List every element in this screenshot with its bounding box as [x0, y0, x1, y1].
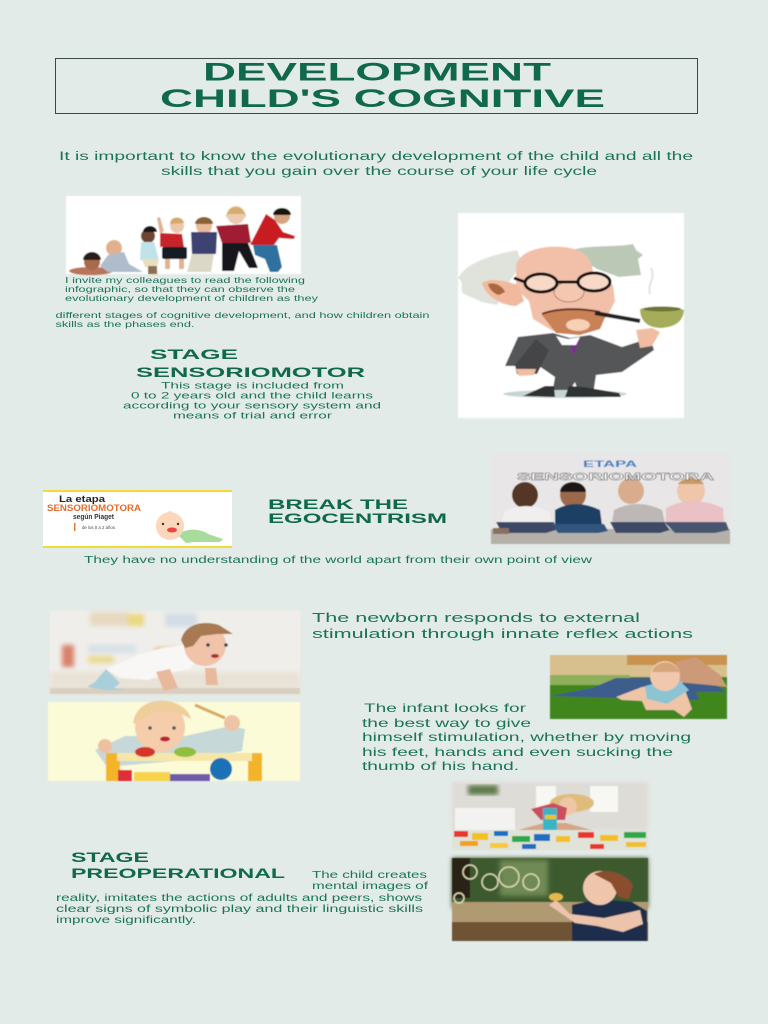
banner: La etapa sensoriomotora: [43, 490, 232, 548]
nose: [554, 282, 584, 302]
invitation text: skills as the phases end.: [56, 319, 194, 329]
invitation text: different stages of cognitive development, and how children obtain: [56, 310, 430, 320]
hand: [516, 328, 660, 376]
child 7: red shirt and jeans: [250, 208, 295, 272]
banner: La etapa sensoriomotora: SENSORIOMOTORA: [47, 503, 142, 513]
hair: [458, 250, 522, 305]
invitation text: I invite my colleagues to read the following: [65, 275, 305, 285]
infant stimulation text: himself stimulation, whether by moving: [362, 730, 691, 744]
child 4: red shirt: [157, 217, 187, 269]
banner: La etapa sensoriomotora: según Piaget: [73, 514, 115, 521]
preoperational description: mental images of: [312, 881, 428, 892]
newborn reflex text: [312, 610, 694, 641]
heading: break the egocentrism: BREAK THE: [268, 497, 408, 512]
pipe: [595, 313, 640, 321]
preoperational description: The child creates: [312, 870, 427, 881]
child 3: aqua shirt: [140, 226, 159, 275]
babies: [493, 477, 729, 534]
icon: crawling baby: [156, 511, 223, 543]
preoperational description: [56, 870, 428, 926]
banner: La etapa sensoriomotora: de los 0 a 2 años: [82, 525, 116, 530]
head: [516, 247, 615, 333]
shoes: [503, 390, 627, 398]
infant stimulation text: the best way to give: [362, 716, 532, 730]
child 2: baby sitting: [100, 240, 143, 272]
title: DEVELOPMENT: [203, 58, 551, 86]
banner: La etapa sensoriomotora: La etapa: [59, 494, 106, 505]
photo: row of growing children: [66, 196, 301, 275]
intro text: skills that you gain over the course of your life cycle: [161, 166, 597, 178]
heading: stage preoperational: [71, 849, 286, 881]
sensoriomotor description: means of trial and error: [173, 410, 332, 422]
photo: four sitting babies: SENSORIOMOTORA: [517, 471, 715, 483]
egocentrism caption: They have no understanding of the world apart from their own point of view: [84, 555, 593, 566]
child 1: crawling baby: [69, 252, 113, 275]
photo: four sitting babies: [491, 453, 730, 544]
title: CHILD'S COGNITIVE: [160, 85, 605, 113]
infant stimulation text: his feet, hands and even sucking the: [362, 745, 674, 759]
photo: child playing with blocks: [452, 782, 648, 850]
intro text: It is important to know the evolutionary development of the child and all the: [59, 151, 693, 163]
glasses: [514, 273, 610, 292]
heading: break the egocentrism: [268, 497, 447, 526]
heading: stage preoperational: STAGE: [71, 849, 149, 865]
illustration: Piaget caricature: [458, 213, 684, 418]
suit: [505, 333, 654, 395]
scattered blocks: [452, 830, 648, 850]
preoperational description: improve significantly.: [56, 915, 196, 926]
toy: [106, 753, 262, 781]
infant stimulation text: thumb of his hand.: [362, 759, 519, 773]
title: [56, 58, 698, 114]
photo: girl blowing bubbles: [452, 858, 648, 941]
photo caption text: ETAPA: [583, 459, 638, 469]
photo: baby with toy xylophone: [48, 701, 300, 781]
heading: stage sensoriomotor: SENSORIOMOTOR: [136, 364, 365, 380]
heading: stage preoperational: PREOPERATIONAL: [71, 865, 286, 881]
photo: crawling baby in nursery: [50, 611, 300, 694]
sensoriomotor description: [123, 380, 381, 422]
ear: [482, 280, 524, 306]
child 6: blonde girl: [216, 206, 258, 271]
preoperational description: clear signs of symbolic play and their linguistic skills: [56, 904, 423, 915]
heading: break the egocentrism: EGOCENTRISM: [268, 511, 447, 526]
heading: stage sensoriomotor: [136, 346, 365, 380]
invitation text: evolutionary development of children as they: [65, 293, 319, 303]
child 5: navy shirt: [187, 217, 217, 272]
chin and mouth: [542, 309, 606, 335]
sensoriomotor description: This stage is included from: [161, 380, 344, 392]
baby: [106, 645, 198, 680]
newborn reflex text: stimulation through innate reflex actions: [312, 626, 694, 641]
photo: baby crawling on grass: [550, 655, 727, 719]
infant stimulation text: The infant looks for: [364, 701, 526, 715]
preoperational description: reality, imitates the actions of adults and peers, shows: [56, 893, 422, 904]
invitation text: [56, 275, 430, 329]
newborn reflex text: The newborn responds to external: [312, 610, 640, 625]
sensoriomotor description: 0 to 2 years old and the child learns: [131, 390, 373, 402]
intro text: [59, 151, 693, 178]
heading: stage sensoriomotor: STAGE: [150, 346, 238, 362]
invitation text: infographic, so that they can observe the: [65, 284, 295, 294]
infant stimulation text: [362, 701, 691, 773]
sensoriomotor description: according to your sensory system and: [123, 400, 381, 412]
